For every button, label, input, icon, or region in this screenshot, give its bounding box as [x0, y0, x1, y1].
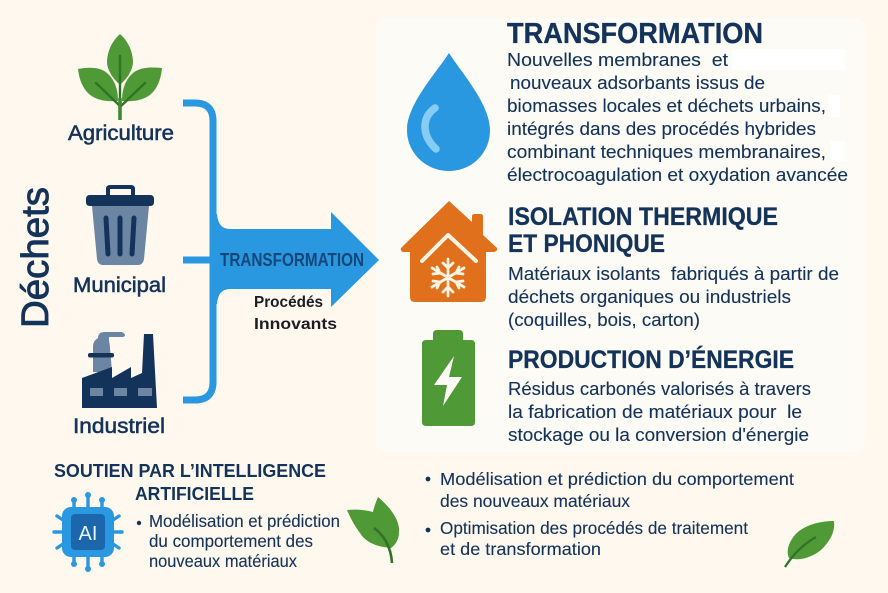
icon: agriculture plant — [78, 34, 162, 120]
section: transformation: Nouvelles membranes et — [507, 49, 728, 70]
section: isolation: ET PHONIQUE — [508, 230, 665, 258]
section: isolation: ISOLATION THERMIQUE — [508, 203, 778, 231]
icon: house with snowflake — [401, 201, 497, 302]
icon: leaf right — [785, 521, 834, 567]
caption: procédés innovants — [254, 294, 337, 333]
section: isolation: Matériaux isolants fabriqués à partir de — [508, 263, 839, 284]
section: production d'énergie: stockage ou la conversion d'énergie — [508, 424, 809, 445]
text: bullets right: et de transformation — [440, 539, 601, 559]
section: transformation — [507, 18, 848, 185]
heading: AI support — [54, 460, 326, 504]
label: Agriculture: Agriculture — [68, 122, 174, 145]
section: production d'énergie — [508, 345, 811, 445]
text: bullets right — [426, 469, 794, 559]
section: isolation: déchets organiques ou industriels — [508, 286, 791, 307]
section: production d'énergie: PRODUCTION D’ÉNERGIE — [508, 345, 794, 374]
label: Municipal: Municipal — [73, 274, 166, 297]
text: AI bullet left: nouveaux matériaux — [149, 551, 297, 571]
arrow: bracket into transformation arrow — [183, 103, 379, 400]
text: AI bullet left — [137, 511, 340, 571]
section: isolation — [508, 203, 839, 330]
heading: AI support: SOUTIEN PAR L’INTELLIGENCE — [54, 460, 326, 481]
vertical title: Déchets: Déchets — [15, 187, 57, 328]
icon: municipal trash bin — [86, 187, 154, 265]
icon: water drop — [407, 53, 490, 171]
section: production d'énergie: la fabrication de matériaux pour le — [508, 401, 802, 422]
label: Industriel: Industriel — [73, 415, 165, 438]
icon: AI chip — [54, 492, 122, 572]
section: transformation: électrocoagulation et oxydation avancée — [507, 164, 848, 185]
icon: industrial factory — [82, 332, 157, 408]
section: transformation: nouveaux adsorbants issus de — [510, 72, 765, 93]
text: AI bullet left: Modélisation et prédiction — [149, 511, 340, 531]
icon: AI chip: AI — [79, 523, 97, 545]
caption: procédés innovants: Innovants — [254, 316, 337, 333]
text: bullets right: des nouveaux matériaux — [440, 491, 630, 511]
text: AI bullet left: du comportement des — [149, 531, 313, 551]
text: bullets right: Optimisation des procédés de traitement — [440, 518, 748, 538]
arrow label: TRANSFORMATION — [220, 249, 364, 270]
heading: AI support: ARTIFICIELLE — [135, 483, 254, 504]
section: transformation: biomasses locales et déchets urbains, — [507, 95, 826, 116]
panel: outputs background — [376, 18, 865, 452]
section: production d'énergie: Résidus carbonés valorisés à travers — [508, 378, 811, 399]
text: bullets right: Modélisation et prédiction du comportement — [440, 469, 794, 489]
caption: procédés innovants: Procédés — [254, 294, 323, 311]
icon: battery — [422, 330, 475, 426]
icon: leaf left — [347, 497, 399, 563]
section: transformation: intégrés dans des procédés hybrides — [507, 118, 816, 139]
section: isolation: (coquilles, bois, carton) — [508, 309, 700, 330]
section: transformation: TRANSFORMATION — [507, 18, 763, 50]
section: transformation: combinant techniques membranaires, — [507, 141, 826, 162]
